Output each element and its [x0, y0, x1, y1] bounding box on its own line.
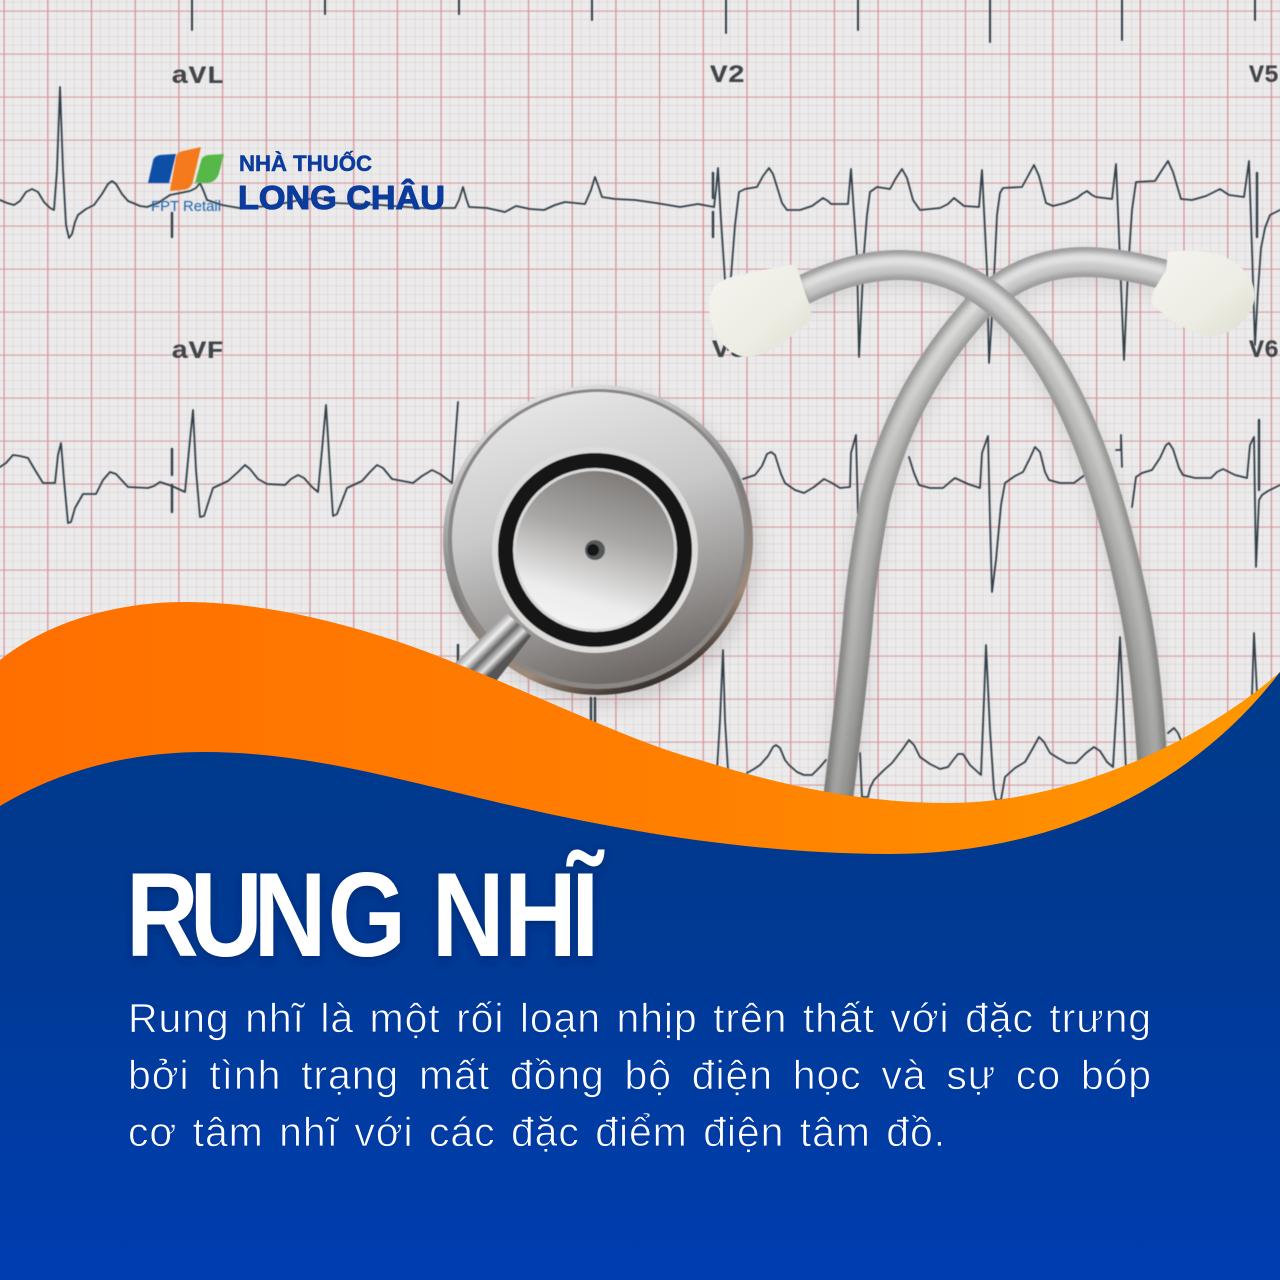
body text: bởi tình trạng mất đồng bộ điện học và sự co bóp: [128, 1052, 1152, 1098]
chestpiece stem: [452, 613, 531, 684]
chestpiece outer disk: [443, 385, 753, 695]
orange wave band: [0, 602, 1280, 1000]
logo label: FPT Retail: FPT Retail: [151, 198, 221, 215]
ECG lead labels: V6: [1249, 336, 1279, 365]
ECG lead labels: V5: [712, 336, 747, 365]
body text: cơ tâm nhĩ với các đặc điểm điện tâm đồ.: [128, 1109, 946, 1155]
icon: stethoscope tubes and ear tips: [709, 251, 1255, 806]
ECG lead labels: V5: [1249, 61, 1279, 90]
heading: RUNG NHĨ: RUNG NHĨ: [126, 848, 605, 982]
ECG lead labels: V2: [710, 61, 745, 90]
icon: stethoscope chestpiece: [443, 385, 760, 704]
logo label: Nhà thuốc: NHÀ THUỐC: [239, 150, 372, 176]
body text: Rung nhĩ là một rối loạn nhịp trên thất với đặc trưng: [128, 995, 1152, 1041]
tube: right branch: [835, 258, 1166, 800]
ECG lead labels: aVF: [171, 337, 224, 366]
logo: FPT Retail / Nhà thuốc Long Châu: [148, 147, 445, 216]
body text: [128, 995, 1152, 1155]
ear tip: right: [1152, 251, 1255, 336]
ear tip: left: [709, 265, 813, 357]
blue wave panel: [0, 672, 1280, 1280]
logo mark: [148, 147, 224, 191]
ECG lead labels: aVL: [171, 62, 224, 91]
logo label: Long Châu: LONG CHÂU: [238, 179, 445, 216]
ECG lead labels: [171, 61, 1279, 366]
chestpiece inner ring and diaphragm: [492, 447, 698, 653]
ECG traces: [0, 0, 1280, 800]
tube: left branch: [803, 261, 1157, 790]
